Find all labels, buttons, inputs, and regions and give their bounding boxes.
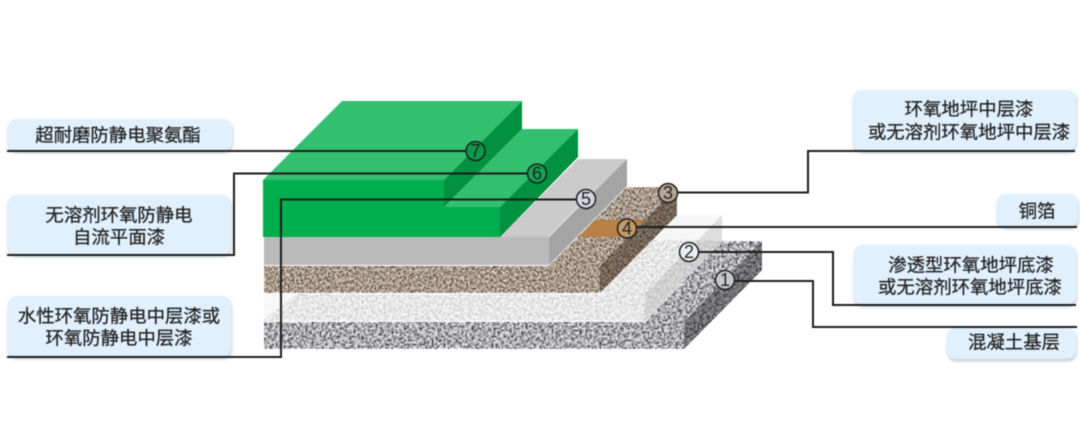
layer 2: penetrating primer: [264, 215, 722, 321]
layer 3: brown mid coat: [264, 187, 677, 293]
label: polyurethane top coat: 超耐磨防静电聚氨酯: [35, 124, 201, 146]
label: antistatic mid coat: [8, 296, 231, 357]
label: primer: [854, 245, 1076, 305]
label: epoxy mid coat: 环氧地坪中层漆: [905, 98, 1033, 120]
marker 1: 1: [720, 270, 730, 290]
leader line 6: [7, 174, 528, 255]
label: epoxy mid coat: 或无溶剂环氧地坪中层漆: [868, 122, 1070, 142]
layer 6: self-levelling green: [263, 129, 578, 237]
leader line 4: [637, 226, 1077, 228]
marker 6: [528, 164, 546, 184]
marker 7: 7: [470, 141, 481, 161]
label: primer: 渗透型环氧地坪底漆: [888, 254, 1054, 276]
label: primer: 或无溶剂环氧地坪底漆: [878, 276, 1062, 298]
label: antistatic mid coat: 环氧防静电中层漆: [45, 328, 193, 348]
floor system diagram: [6, 90, 1080, 363]
label: copper foil: 铜箔: [1019, 200, 1055, 222]
label: concrete base: 混凝土基层: [968, 332, 1060, 352]
leader line 3: [678, 151, 1075, 192]
label: polyurethane top coat: [8, 119, 232, 151]
marker 2: 2: [684, 242, 694, 262]
label: self-levelling coat: [8, 195, 231, 255]
label: concrete base: [947, 328, 1076, 359]
layer 1: concrete base: [264, 241, 762, 349]
marker 5: [576, 189, 596, 209]
leader line 2: [699, 252, 1076, 305]
leader line 5: [7, 200, 576, 357]
label: self-levelling coat: 自流平面漆: [73, 226, 165, 248]
layer 5: grey mid coat: [264, 159, 627, 265]
leader line 1: [735, 281, 1077, 327]
marker 2: [680, 242, 698, 262]
marker 5: 5: [581, 189, 591, 209]
marker 4: 4: [622, 218, 632, 238]
layer 7: polyurethane top coat: [263, 101, 522, 207]
marker 7: [466, 141, 485, 161]
marker 3: 3: [663, 183, 673, 203]
marker 3: [658, 183, 678, 203]
marker 1: [716, 270, 734, 290]
label: epoxy mid coat: [853, 90, 1076, 151]
label: self-levelling coat: 无溶剂环氧防静电: [45, 204, 193, 226]
label: copper foil: [997, 194, 1078, 227]
label: antistatic mid coat: 水性环氧防静电中层漆或: [18, 306, 220, 326]
marker 6: 6: [532, 164, 542, 184]
leader line 7: [7, 150, 466, 152]
layer 4: copper foil: [579, 220, 645, 237]
marker 4: [618, 218, 636, 238]
